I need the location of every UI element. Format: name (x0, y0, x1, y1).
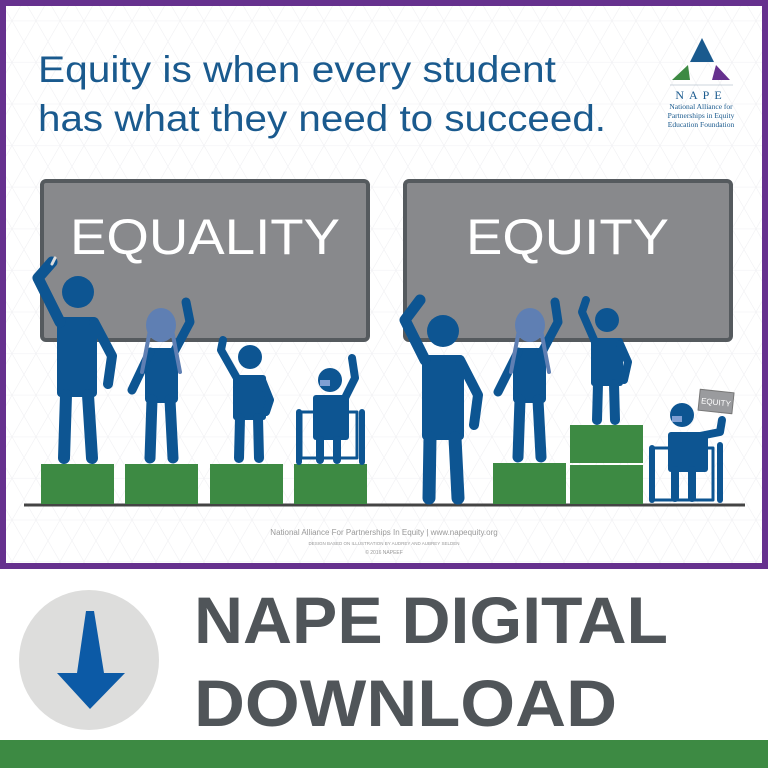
title: has what they need to succeed. (38, 98, 606, 139)
figure: boy on stacked boxes (582, 300, 628, 420)
board: EQUITY: EQUITY (466, 209, 669, 265)
ground line (24, 504, 745, 506)
title (38, 49, 606, 139)
panel: infographic frame (3, 3, 765, 566)
board: EQUALITY: EQUALITY (70, 209, 340, 265)
icon: download arrow (19, 590, 159, 730)
figure: wheelchair user with sign (652, 389, 734, 500)
logo: NAPE: National Alliance for (669, 102, 733, 111)
green footer bar (0, 740, 768, 768)
figure: girl (132, 302, 190, 458)
board: EQUITY (405, 181, 731, 340)
figure: wheelchair user (299, 358, 362, 462)
heading: NAPE DIGITAL DOWNLOAD: NAPE DIGITAL (194, 583, 668, 657)
logo: NAPE: Partnerships in Equity (668, 111, 735, 120)
title: Equity is when every student (38, 49, 557, 90)
footer credits (270, 528, 498, 556)
figure: boy (221, 340, 270, 458)
heading: NAPE DIGITAL DOWNLOAD (194, 583, 668, 740)
figure: girl (498, 302, 558, 457)
footer credits: DESIGN BASED ON ILLUSTRATION BY AUDREY AND AUBREY SELDEN (309, 541, 459, 546)
footer credits: © 2016 NAPEEF (365, 549, 403, 556)
logo: NAPE (668, 38, 735, 129)
heading: NAPE DIGITAL DOWNLOAD: DOWNLOAD (194, 666, 617, 740)
boxes: equality (41, 464, 367, 504)
logo: NAPE: NAPE (675, 88, 727, 102)
logo: NAPE: Education Foundation (668, 120, 734, 129)
sign: EQUITY: EQUITY (701, 396, 732, 409)
figure: tall man (405, 300, 478, 498)
figures: equality (38, 258, 362, 462)
footer credits: National Alliance For Partnerships In Equity | www.napequity.org (270, 528, 498, 537)
figures: equity (405, 300, 734, 500)
figure: tall man (38, 258, 112, 458)
boxes: equity (493, 425, 643, 504)
board: EQUALITY (42, 181, 368, 340)
